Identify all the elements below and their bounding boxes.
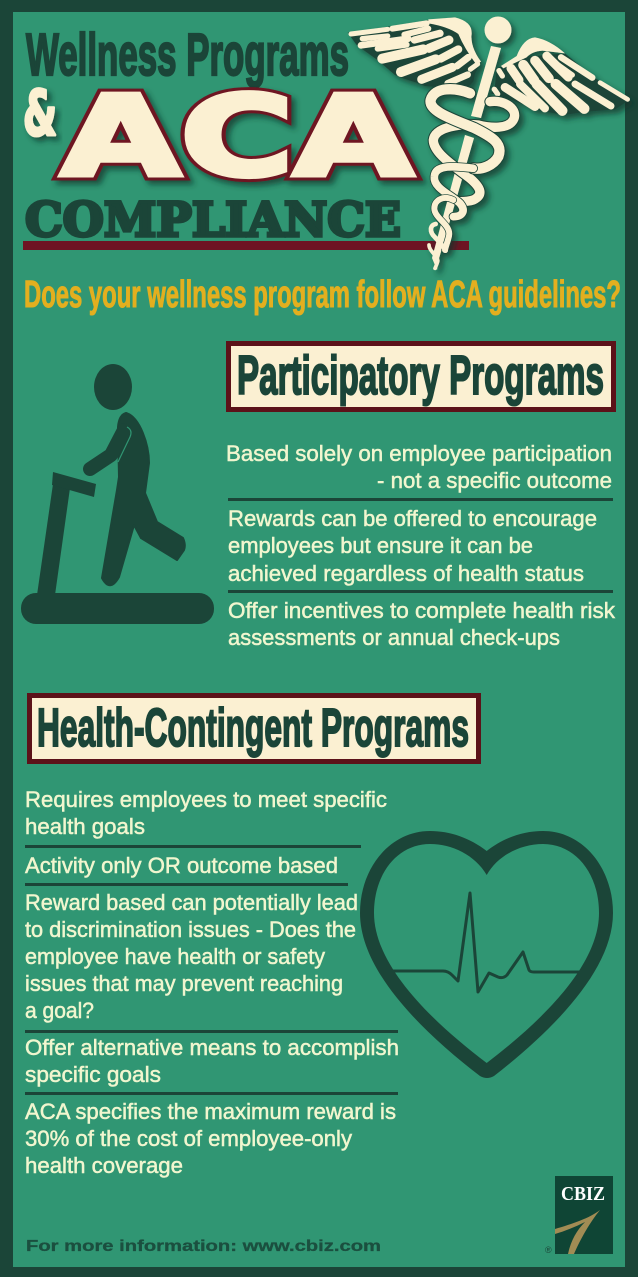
text: rewards — [228, 506, 597, 586]
text: based solely — [226, 441, 612, 493]
header — [23, 16, 630, 270]
title: ACA: ACA — [61, 73, 413, 202]
text: alternative means: Offer alternative means to accomplish — [25, 1035, 399, 1060]
text: reward based: employee have health or safety — [25, 944, 325, 969]
logo: CBIZ — [545, 1176, 613, 1255]
right wing — [491, 37, 630, 115]
text: reward based: Reward based can potentially lead — [25, 890, 358, 915]
text: incentives — [228, 598, 616, 650]
text: alternative means — [25, 1035, 399, 1087]
text: reward based: a goal? — [25, 998, 94, 1023]
text: maximum reward: ACA specifies the maximum reward is — [25, 1099, 396, 1124]
panel: participatory programs — [226, 341, 616, 650]
text: maximum reward: 30% of the cost of employee-only — [25, 1126, 352, 1151]
heading box: Health-Contingent Programs — [27, 693, 481, 764]
text: incentives: Offer incentives to complete health risk — [228, 598, 616, 623]
text: reward based: to discrimination issues - Does the — [25, 917, 356, 942]
text: alternative means: specific goals — [25, 1062, 161, 1087]
title: Wellness Programs: Wellness Programs — [26, 22, 349, 88]
text: reward based — [25, 890, 358, 1023]
text: based solely: Based solely on employee participation — [226, 441, 612, 466]
text: requires: health goals — [25, 814, 145, 839]
logo: CBIZ: CBIZ — [561, 1183, 605, 1205]
text: rewards: employees but ensure it can be — [228, 533, 533, 558]
footer: website: For more information: www.cbiz.com — [26, 1238, 381, 1255]
rod — [432, 16, 512, 270]
icon: caduceus — [348, 16, 630, 270]
text: activity: Activity only OR outcome based — [25, 853, 338, 878]
text: requires: Requires employees to meet specific — [25, 787, 387, 812]
title: COMPLIANCE: COMPLIANCE — [25, 193, 401, 248]
icon: heart with heartbeat — [360, 831, 613, 1078]
panel: health-contingent programs — [25, 693, 481, 1178]
snakes — [429, 89, 515, 268]
logo: CBIZ: ® — [545, 1245, 552, 1255]
title underline bar — [23, 241, 469, 250]
icon: person on treadmill — [21, 364, 214, 624]
text: maximum reward — [25, 1099, 396, 1178]
text: maximum reward: health coverage — [25, 1153, 183, 1178]
text: rewards: Rewards can be offered to encourage — [228, 506, 597, 531]
text: reward based: issues that may prevent reaching — [25, 971, 343, 996]
text: requires — [25, 787, 387, 839]
title: ampersand: & — [23, 77, 57, 150]
left wing — [348, 17, 481, 90]
title: ACA: ACA — [61, 73, 413, 202]
text: incentives: assessments or annual check-ups — [228, 625, 560, 650]
text: rewards: achieved regardless of health status — [228, 561, 584, 586]
text: based solely: - not a specific outcome — [377, 468, 612, 493]
